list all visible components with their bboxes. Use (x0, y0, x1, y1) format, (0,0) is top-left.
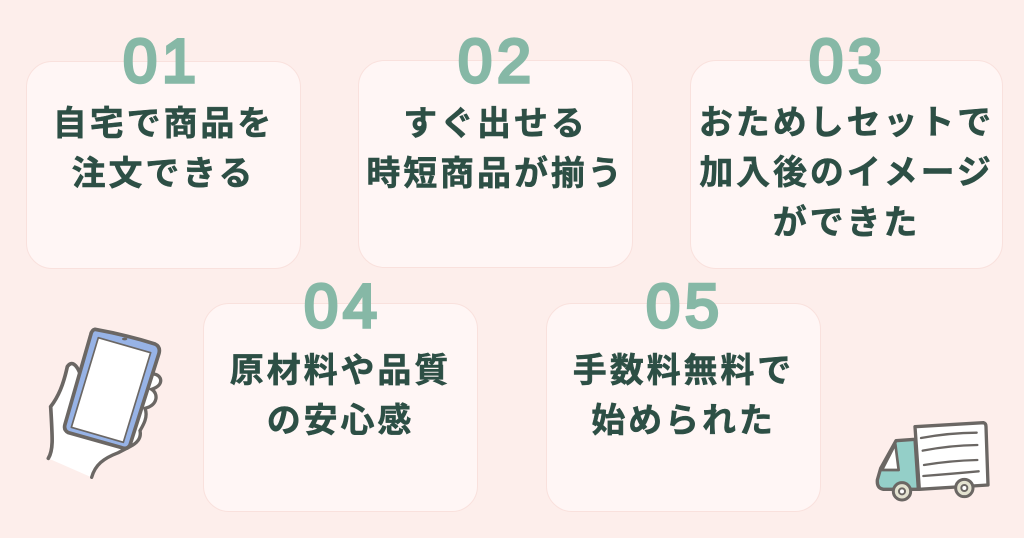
truck cab (877, 439, 918, 489)
wheels (893, 479, 973, 500)
text: card 01: 注文できる (72, 155, 255, 193)
phone speaker (122, 338, 127, 340)
cargo lines (921, 433, 979, 476)
panel: card 05 (546, 303, 821, 512)
hand (48, 364, 161, 477)
number 04: 04 (304, 272, 382, 340)
icon: hand holding smartphone (46, 328, 162, 479)
text: card 05: 始められた (591, 402, 776, 440)
text: card 02 (366, 105, 625, 193)
panel: card 03 (690, 60, 1003, 269)
number 01: 01 (123, 27, 201, 95)
cab window (882, 444, 899, 470)
text: card 05 (573, 352, 794, 440)
text: card 03: おためしセットで (699, 104, 994, 142)
text: card 01 (53, 105, 274, 193)
text: card 03 (699, 104, 994, 242)
truck cargo box (915, 423, 988, 489)
phone body (65, 329, 159, 448)
panel: card 04 (203, 303, 478, 512)
icon: delivery truck (876, 421, 990, 502)
panel: card 01 (26, 61, 301, 269)
text: card 04 (230, 352, 451, 440)
text: card 03: ができた (773, 204, 920, 242)
text: card 03: 加入後のイメージ (699, 154, 994, 192)
phone screen (71, 338, 151, 442)
text: card 02: すぐ出せる (403, 105, 588, 143)
number 02: 02 (458, 27, 536, 95)
text: card 04: 原材料や品質 (230, 352, 451, 390)
text: card 02: 時短商品が揃う (366, 155, 625, 193)
number 03: 03 (809, 27, 887, 95)
text: card 01: 自宅で商品を (53, 105, 274, 143)
text: card 04: の安心感 (267, 402, 414, 440)
panel: card 02 (358, 60, 633, 268)
number 05: 05 (646, 272, 724, 340)
text: card 05: 手数料無料で (573, 352, 794, 390)
